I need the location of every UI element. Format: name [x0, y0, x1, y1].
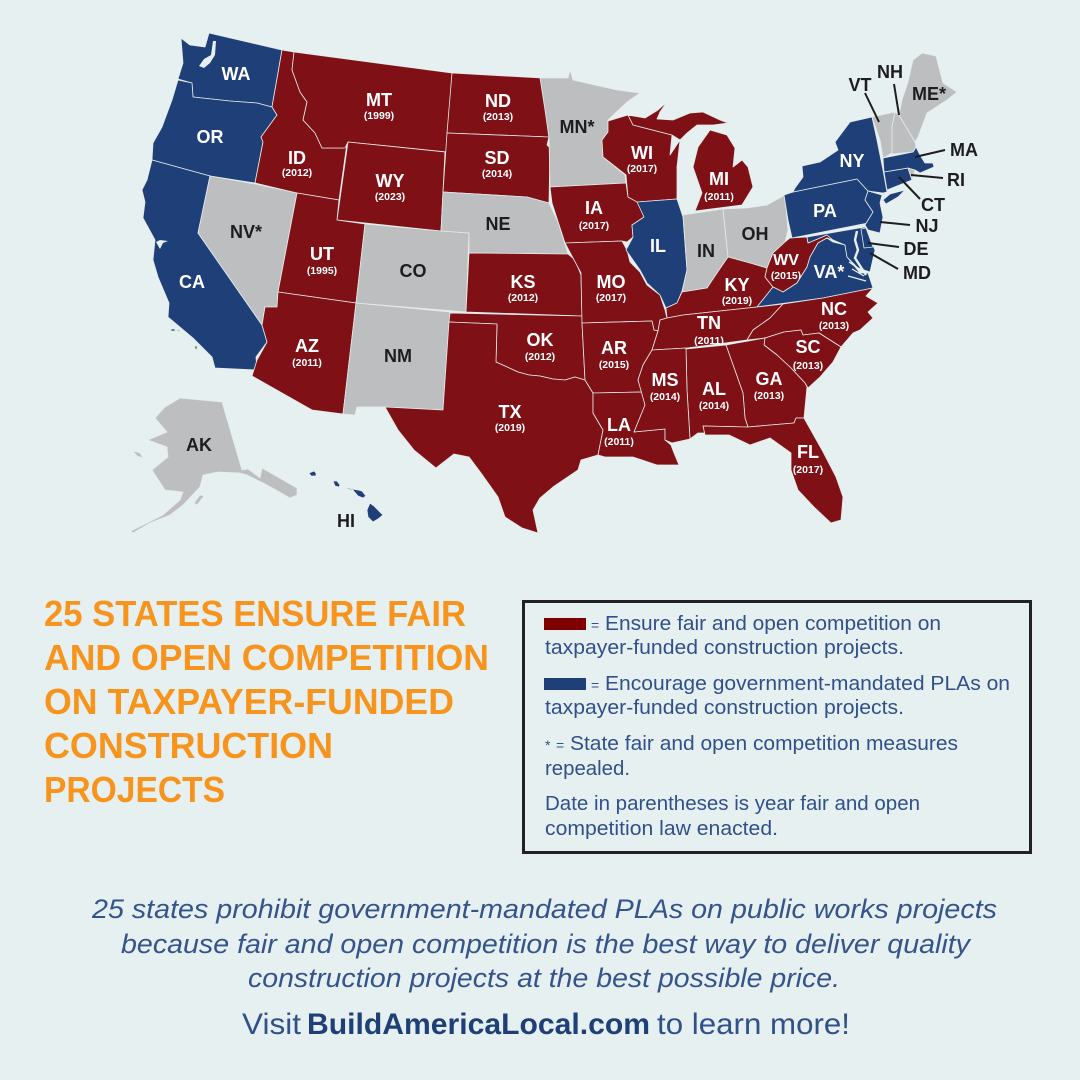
islands: California channel islands [171, 329, 197, 349]
closing statement [91, 894, 997, 993]
state: Alabama: AL [702, 379, 726, 399]
state: Florida: FL [797, 442, 819, 462]
state: North Dakota [447, 73, 549, 137]
legend: blue key: = [591, 677, 599, 693]
state: Wisconsin [602, 115, 680, 202]
legend: date note: competition law enacted. [545, 818, 778, 840]
legend: red key: Ensure fair and open competition on [605, 613, 941, 635]
title: PROJECTS [44, 769, 225, 810]
state: West Virginia: (2015) [771, 270, 801, 282]
state: Utah [278, 193, 365, 303]
title: ON TAXPAYER-FUNDED [44, 681, 454, 722]
state: Oregon [152, 80, 277, 183]
label: New Hampshire with leader [877, 62, 903, 115]
state: Arkansas [582, 321, 658, 393]
state: Iowa: IA [585, 198, 603, 218]
label: Rhode Island with leader [911, 170, 965, 190]
state: Alaska [131, 398, 297, 533]
state: Utah: (1995) [307, 265, 337, 277]
state: Alaska: AK [186, 435, 212, 455]
state: Texas: TX [498, 402, 522, 422]
state: Kansas: KS [510, 272, 536, 292]
state: Wyoming [337, 142, 445, 231]
state: Georgia: (2013) [754, 390, 784, 402]
state: Kansas: (2012) [508, 292, 538, 304]
closing statement: 25 states prohibit government-mandated PLAs on public works projects [91, 894, 997, 924]
state: Indiana: IN [697, 241, 715, 261]
state: West Virginia: WV [773, 252, 799, 269]
label: New Jersey with leader: NJ [915, 216, 939, 236]
state: Minnesota [540, 70, 640, 187]
legend: red key: taxpayer-funded construction projects. [545, 637, 904, 659]
state: Washington [178, 33, 282, 107]
label: Vermont with leader: VT [848, 75, 872, 95]
state: Oklahoma: OK [526, 330, 554, 350]
state: Ohio [723, 195, 788, 268]
call to action [242, 1008, 850, 1041]
state: Ohio: OH [742, 224, 768, 244]
state: Arizona: (2011) [292, 357, 322, 369]
state: Oklahoma [449, 313, 585, 380]
state: Louisiana: LA [607, 415, 631, 435]
state: Minnesota: MN* [560, 117, 594, 137]
label: New Jersey with leader [880, 216, 939, 236]
state: Wyoming: WY [376, 171, 404, 191]
state: Mississippi: (2014) [650, 391, 680, 403]
state: New York [793, 117, 905, 204]
state: Massachusetts [883, 147, 934, 173]
state: Nevada: NV* [230, 222, 262, 242]
legend: blue key: Encourage government-mandated PLAs on [605, 673, 1010, 695]
call to action: Visit [242, 1008, 302, 1041]
state: Virginia: VA* [814, 262, 844, 282]
state: Arkansas: (2015) [599, 359, 629, 371]
state: Indiana [682, 209, 728, 292]
state: Vermont [872, 112, 895, 158]
state: Louisiana [593, 392, 679, 465]
legend: blue key: taxpayer-funded construction projects. [545, 697, 904, 719]
state: Pennsylvania [784, 179, 873, 238]
state: Oklahoma: (2012) [525, 351, 555, 363]
state: California [142, 160, 267, 370]
legend panel [522, 600, 1032, 854]
state: Montana: MT [366, 90, 392, 110]
state: South Dakota: SD [484, 148, 510, 168]
state: Tennessee: TN [697, 313, 721, 333]
state: Nevada [198, 176, 297, 325]
state: Nebraska: NE [485, 214, 511, 234]
label: New Hampshire with leader: NH [877, 62, 903, 82]
state: Wisconsin: WI [631, 143, 653, 163]
label: Vermont with leader [848, 75, 879, 122]
state: Virginia [757, 238, 873, 307]
legend: asterisk note: repealed. [545, 758, 630, 780]
state: Missouri [565, 241, 667, 331]
state: Pennsylvania: PA [813, 201, 837, 221]
closing statement: construction projects at the best possible price. [248, 963, 840, 993]
legend: asterisk note: = [556, 737, 564, 753]
state: North Carolina [747, 288, 878, 347]
state: North Carolina: (2013) [819, 320, 849, 332]
state: Oregon: OR [196, 127, 224, 147]
legend: red key: = [591, 617, 599, 633]
state: South Carolina [764, 330, 841, 388]
state: Kentucky: (2019) [722, 295, 752, 307]
state: Washington: WA [222, 64, 250, 84]
state: Utah: UT [310, 244, 334, 264]
state: Hawaii: HI [337, 511, 355, 531]
state: Texas: (2019) [495, 422, 525, 434]
state: Georgia [726, 338, 807, 427]
state: South Carolina: (2013) [793, 360, 823, 372]
state: Colorado [356, 224, 469, 312]
state: Delaware [861, 228, 873, 248]
state: Alabama: (2014) [699, 400, 729, 412]
title: 25 STATES ENSURE FAIR [44, 593, 466, 634]
call to action: to learn more! [657, 1008, 850, 1041]
state: Florida [703, 418, 843, 523]
state: Arizona: AZ [295, 336, 319, 356]
state: Alabama [686, 345, 748, 439]
call to action: BuildAmericaLocal.com [307, 1008, 650, 1041]
state: Missouri: MO [596, 272, 626, 292]
legend: blue key [544, 673, 1010, 719]
state: Kentucky: KY [724, 275, 750, 295]
legend: asterisk note: State fair and open competition measures [570, 733, 958, 755]
state: Montana [292, 52, 452, 152]
state: Louisiana: (2011) [604, 436, 634, 448]
state: Maine [899, 53, 957, 142]
label: Massachusetts with leader: MA [950, 140, 978, 160]
state: Illinois [626, 199, 687, 308]
title: CONSTRUCTION [44, 725, 333, 766]
state: Maryland [807, 227, 875, 272]
state: New York: NY [839, 151, 865, 171]
label: Connecticut with leader: CT [921, 195, 945, 215]
state: Wisconsin: (2017) [627, 163, 657, 175]
legend: red key [544, 613, 941, 659]
state: Tennessee [652, 304, 783, 350]
state: Kansas [466, 253, 582, 316]
state: Maine: ME* [912, 84, 946, 104]
state: West Virginia [765, 235, 833, 292]
state: Arkansas: AR [601, 338, 627, 358]
state: North Dakota: ND [485, 91, 511, 111]
closing statement: because fair and open competition is the best way to deliver quality [121, 929, 972, 959]
state: Texas [385, 322, 603, 533]
state: Kentucky [666, 257, 773, 318]
label: Rhode Island with leader: RI [947, 170, 965, 190]
state: Connecticut [884, 168, 912, 190]
state: Iowa [550, 183, 644, 243]
label: Delaware with leader [868, 239, 929, 259]
state: Wyoming: (2023) [375, 191, 405, 203]
state: Nebraska [441, 192, 568, 254]
legend: date note: Date in parentheses is year fair and open [545, 793, 920, 815]
state: Idaho: (2012) [282, 167, 312, 179]
label: Maryland with leader [870, 253, 931, 283]
state: New Mexico: NM [384, 346, 412, 366]
state: Tennessee: (2011) [694, 335, 724, 347]
state: Colorado: CO [400, 261, 426, 281]
state: South Dakota [443, 133, 550, 203]
legend: asterisk note: * [545, 737, 551, 753]
state: Iowa: (2017) [579, 220, 609, 232]
state: South Carolina: SC [795, 337, 821, 357]
state: Idaho [255, 50, 347, 200]
state: New Mexico [343, 303, 450, 415]
label: Connecticut with leader [899, 177, 945, 215]
state: South Dakota: (2014) [482, 168, 512, 180]
state: New Jersey [865, 191, 883, 233]
state: Hawaii [309, 471, 383, 531]
legend: asterisk note [545, 733, 958, 780]
state: Mississippi: MS [652, 370, 678, 390]
state: Georgia: GA [756, 369, 783, 389]
title: AND OPEN COMPETITION [44, 637, 489, 678]
legend: date note [545, 793, 920, 840]
label: Massachusetts with leader [915, 140, 978, 160]
state: Florida: (2017) [793, 464, 823, 476]
state: Illinois: IL [650, 236, 666, 256]
state: Mississippi [634, 348, 690, 443]
label: Maryland with leader: MD [903, 263, 931, 283]
title [44, 593, 489, 810]
state: Michigan [628, 102, 753, 211]
state: Arizona [252, 292, 356, 414]
state: California: CA [179, 272, 205, 292]
map of the United States [132, 34, 978, 532]
state: Rhode Island [908, 168, 915, 180]
state: North Dakota: (2013) [483, 111, 513, 123]
label: Delaware with leader: DE [903, 239, 929, 259]
state: Idaho: ID [288, 148, 306, 168]
state: Michigan: (2011) [704, 191, 734, 203]
state: New Hampshire [892, 112, 916, 154]
state: Michigan: MI [709, 169, 729, 189]
feature: Chesapeake Bay and Virginia inlets [848, 231, 866, 281]
state: Montana: (1999) [364, 110, 394, 122]
state: Missouri: (2017) [596, 292, 626, 304]
state: North Carolina: NC [821, 299, 847, 319]
